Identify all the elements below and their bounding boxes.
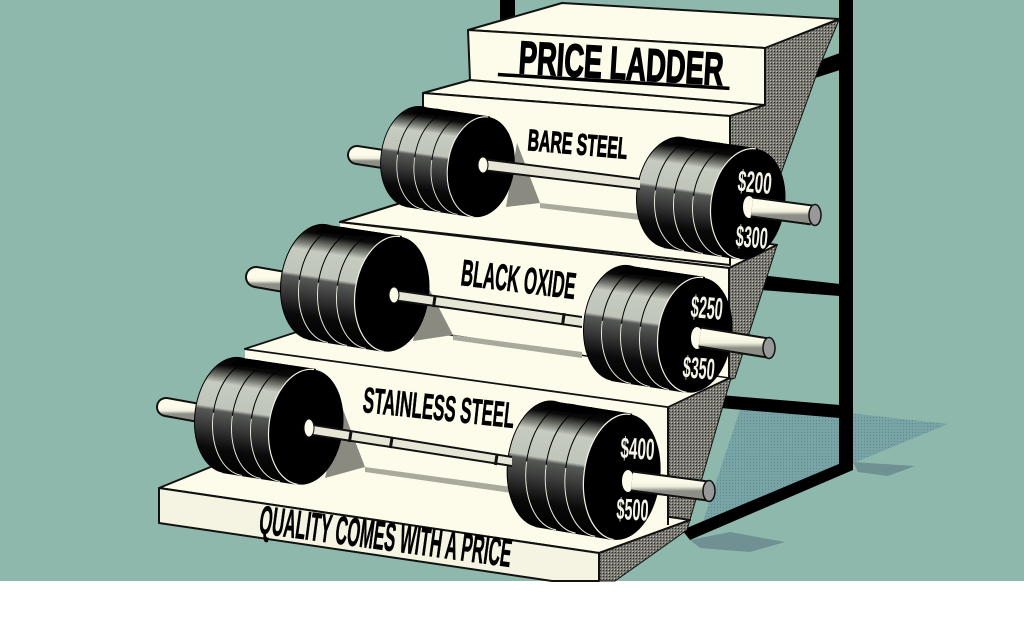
stairs [159, 3, 839, 581]
price: $350: $350 [681, 351, 716, 387]
title: price ladder: PRICE LADDER [517, 31, 725, 95]
barbell: bare steel [357, 102, 821, 264]
title: price ladder [497, 30, 732, 96]
text: STAINLESS STEEL [361, 379, 517, 436]
barbell: black oxide: $250 [689, 289, 724, 327]
label: bare steel: BARE STEEL [526, 124, 629, 166]
price: $400: $400 [620, 432, 655, 467]
text: QUALITY COMES WITH A PRICE [257, 498, 514, 576]
stair side shading [599, 20, 839, 581]
floor shadow [690, 410, 948, 552]
barbell: black oxide [256, 219, 775, 398]
text: BLACK OXIDE [459, 252, 578, 307]
barbell: stainless steel [166, 352, 715, 545]
ladder frame [500, 0, 853, 540]
price: $300: $300 [734, 220, 769, 256]
barbell: stainless steel: $500 [616, 493, 649, 528]
price: $200: $200 [736, 165, 773, 201]
cast shadows on risers [325, 143, 640, 493]
